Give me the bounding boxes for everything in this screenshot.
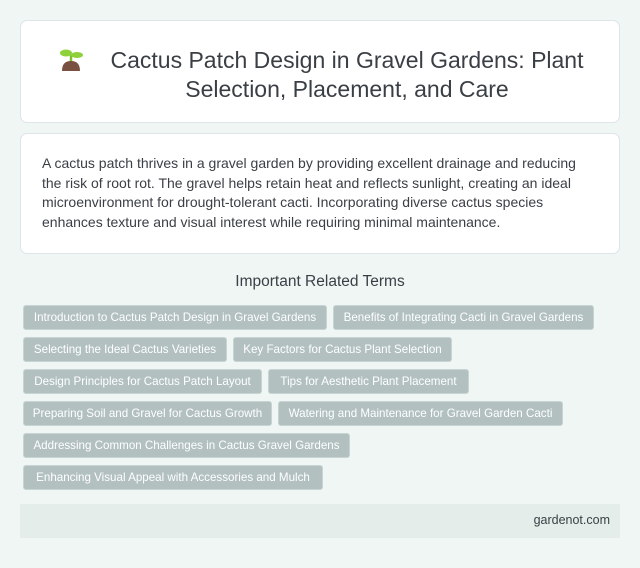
tags: Watering and Maintenance for Gravel Garden Cacti (289, 407, 552, 420)
tags: Introduction to Cactus Patch Design in Gravel Gardens (34, 311, 316, 324)
icon: seedling (60, 50, 83, 71)
description card (20, 133, 620, 254)
heading: related terms: Important Related Terms (235, 273, 405, 290)
tags: Design Principles for Cactus Patch Layout (34, 375, 251, 388)
footer (20, 504, 620, 538)
tags: Benefits of Integrating Cacti in Gravel Gardens (344, 311, 583, 324)
title card (20, 20, 620, 123)
title: Cactus Patch Design in Gravel Gardens: Plant Selection, Placement, and Care (110, 47, 584, 102)
tags: Enhancing Visual Appeal with Accessories and Mulch (36, 471, 310, 484)
description text: A cactus patch thrives in a gravel garden by providing excellent drainage and reducing the risk of root rot. The gravel helps retain heat and reflects sunlight, creating an ideal microenvironment for drought-tolerant cacti. Incorporating diverse cactus species enhances texture and visual interest while requiring minimal maintenance. (42, 155, 576, 230)
tags: Tips for Aesthetic Plant Placement (280, 375, 457, 388)
tags: Key Factors for Cactus Plant Selection (243, 343, 442, 356)
tags: Selecting the Ideal Cactus Varieties (34, 343, 216, 356)
tags: Addressing Common Challenges in Cactus Gravel Gardens (33, 439, 340, 452)
footer source: gardenot.com (534, 513, 610, 527)
tags: Preparing Soil and Gravel for Cactus Growth (33, 407, 262, 420)
